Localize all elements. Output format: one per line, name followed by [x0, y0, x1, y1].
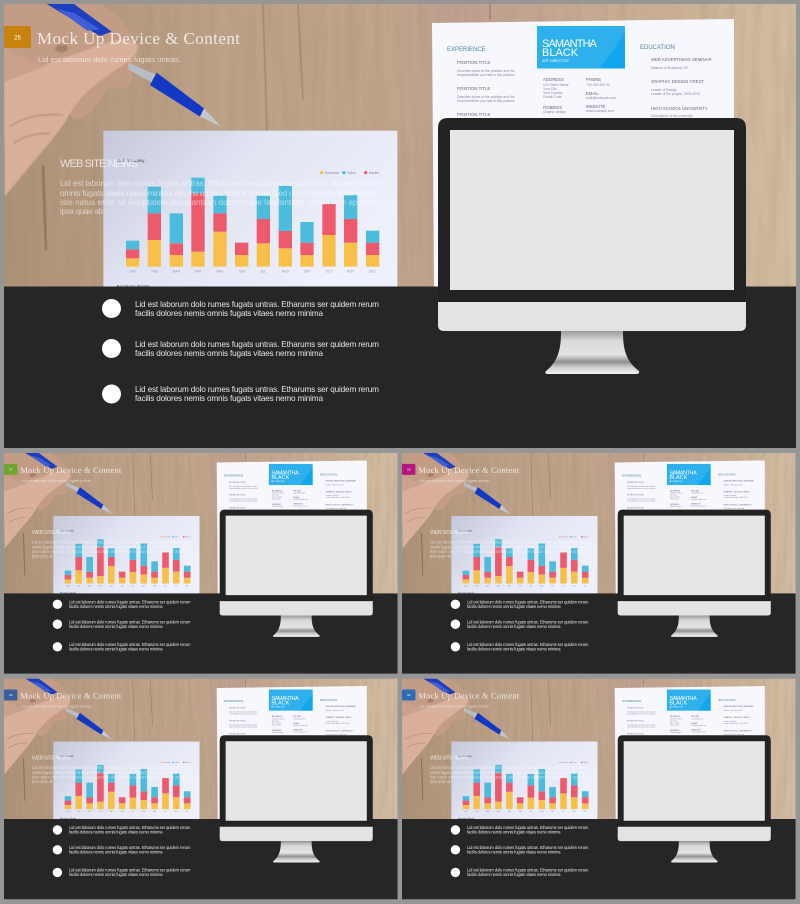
panel: thumbnail slide magenta [402, 453, 796, 674]
dark band [402, 819, 796, 900]
chart paper with stacked bar chart [53, 742, 199, 821]
resume paper: BLACK [669, 700, 688, 706]
bullet list [451, 600, 589, 652]
chart paper with stacked bar chart [103, 131, 397, 289]
monitor mockup [618, 510, 771, 637]
subtitle: Lid est laborum dolo rumes fugats untras. [419, 704, 490, 708]
resume paper: BLACK [271, 475, 290, 481]
news text block [32, 756, 191, 784]
resume paper: SAMANTHA [669, 470, 697, 476]
news text block: ipsa quae ab [430, 553, 452, 558]
resume paper [432, 19, 734, 288]
resume paper: BLACK [542, 47, 579, 59]
bullet list: Lid est laborum dolo rumes fugats untras. Etharums ser quidem rerum [69, 845, 191, 850]
title: Mock Up Device & Content [20, 465, 122, 475]
news text block: WEB SITE NEWS [32, 756, 71, 762]
news text block: iste natus error sit voluptatem accusantium doloremque laudantium, totam rem aperiam [60, 198, 378, 207]
title: Mock Up Device & Content [37, 29, 240, 48]
news text block: Lid est laborum dolo rumes fugats untras. Etharums ser quidem rerum facilis dolores nemis [60, 179, 380, 188]
bullet list: Lid est laborum dolo rumes fugats untras. Etharums ser quidem rerum [135, 340, 379, 349]
news text block: ipsa quae ab [32, 779, 54, 784]
page number badge: 26 [14, 36, 21, 42]
resume paper: SAMANTHA [542, 38, 598, 50]
bullet list: Lid est laborum dolo rumes fugats untras. Etharums ser quidem rerum [69, 642, 191, 647]
news text block: Lid est laborum dolo rumes fugats untras. Etharums ser quidem rerum facilis dolores nemis [430, 539, 589, 544]
chart paper with stacked bar chart [451, 742, 597, 821]
bullet list: Lid est laborum dolo rumes fugats untras. Etharums ser quidem rerum [467, 600, 589, 605]
panel: thumbnail slide blue [402, 679, 796, 900]
bullet list: Lid est laborum dolo rumes fugats untras. Etharums ser quidem rerum [467, 619, 589, 624]
bullet list [102, 299, 379, 404]
bullet list: facilis dolores nemis omnis fugats vitaes nemo minima [69, 872, 163, 877]
hand holding blue pen [402, 679, 510, 774]
resume paper [217, 686, 367, 820]
resume paper [217, 460, 367, 594]
resume paper: SAMANTHA [669, 696, 697, 702]
news text block: omnis fugats vitaes nemo minima rerums unsers sadips amets. Sed ut perspiciatis unde omnis [60, 189, 376, 198]
title: Mock Up Device & Content [418, 465, 520, 475]
title: Mock Up Device & Content [418, 690, 520, 700]
resume paper: SAMANTHA [271, 696, 299, 702]
news text block: iste natus error sit voluptatem accusantium doloremque laudantium, totam rem aperiam [32, 549, 190, 554]
page number badge: 27 [9, 468, 13, 472]
bullet list: facilis dolores nemis omnis fugats vitaes nemo minima [69, 604, 163, 609]
monitor mockup [438, 118, 746, 374]
bullet list: Lid est laborum dolo rumes fugats untras. Etharums ser quidem rerum [467, 867, 589, 872]
wood background photo [4, 453, 398, 594]
news text block: omnis fugats vitaes nemo minima rerums unsers sadips amets. Sed ut perspiciatis unde omnis [430, 770, 587, 775]
panel: main slide [4, 4, 796, 448]
news text block: WEB SITE NEWS [32, 530, 71, 536]
hand holding blue pen [4, 4, 221, 197]
bullet list [53, 825, 191, 877]
bullet list: Lid est laborum dolo rumes fugats untras. Etharums ser quidem rerum [69, 867, 191, 872]
news text block: ipsa quae ab [430, 779, 452, 784]
bullet list: Lid est laborum dolo rumes fugats untras. Etharums ser quidem rerum [135, 300, 379, 309]
resume paper [615, 686, 765, 820]
subtitle: Lid est laborum dolo rumes fugats untras. [21, 704, 92, 708]
subtitle: Lid est laborum dolo rumes fugats untras. [419, 479, 490, 483]
bullet list: facilis dolores nemis omnis fugats vitaes nemo minima [467, 604, 561, 609]
wood background photo [402, 453, 796, 594]
hand holding blue pen [402, 453, 510, 549]
bullet list: facilis dolores nemis omnis fugats vitaes nemo minima [69, 830, 163, 835]
bullet list: Lid est laborum dolo rumes fugats untras. Etharums ser quidem rerum [467, 642, 589, 647]
bullet list: Lid est laborum dolo rumes fugats untras. Etharums ser quidem rerum [69, 600, 191, 605]
news text block: Lid est laborum dolo rumes fugats untras. Etharums ser quidem rerum facilis dolores nemis [430, 765, 589, 770]
chart paper with stacked bar chart [451, 516, 597, 595]
bullet list: facilis dolores nemis omnis fugats vitaes nemo minima [467, 624, 561, 629]
panel: thumbnail slide navy [4, 679, 398, 900]
subtitle: Lid est laborum dolo rumes fugats untras. [38, 55, 181, 64]
bullet list: facilis dolores nemis omnis fugats vitaes nemo minima [135, 394, 323, 403]
bullet list: facilis dolores nemis omnis fugats vitaes nemo minima [135, 349, 323, 358]
page number badge [4, 26, 31, 48]
page number badge: 28 [407, 468, 411, 472]
resume paper: SAMANTHA [271, 470, 299, 476]
resume paper: ART DIRECTOR [271, 480, 285, 483]
bullet list: Lid est laborum dolo rumes fugats untras. Etharums ser quidem rerum [69, 619, 191, 624]
dark band [4, 593, 398, 674]
resume paper: ART DIRECTOR [542, 59, 569, 63]
dark band [4, 286, 796, 448]
subtitle: Lid est laborum dolo rumes fugats untras. [21, 479, 92, 483]
wood background photo [402, 679, 796, 820]
wood background photo [4, 679, 398, 820]
bullet list: facilis dolores nemis omnis fugats vitaes nemo minima [69, 646, 163, 651]
news text block: WEB SITE NEWS [430, 756, 469, 762]
bullet list: Lid est laborum dolo rumes fugats untras. Etharums ser quidem rerum [467, 845, 589, 850]
panel: thumbnail slide green [4, 453, 398, 674]
news text block: WEB SITE NEWS [60, 158, 138, 170]
bullet list: facilis dolores nemis omnis fugats vitaes nemo minima [69, 850, 163, 855]
page number badge: 30 [407, 693, 411, 697]
news text block [430, 756, 589, 784]
news text block: Lid est laborum dolo rumes fugats untras. Etharums ser quidem rerum facilis dolores nemis [32, 539, 191, 544]
resume paper: BLACK [669, 475, 688, 481]
page number badge [4, 464, 17, 475]
chart paper with stacked bar chart [53, 516, 199, 595]
dark band [4, 819, 398, 900]
news text block: omnis fugats vitaes nemo minima rerums unsers sadips amets. Sed ut perspiciatis unde omnis [32, 544, 189, 549]
title: Mock Up Device & Content [20, 690, 122, 700]
news text block: omnis fugats vitaes nemo minima rerums unsers sadips amets. Sed ut perspiciatis unde omnis [430, 544, 587, 549]
bullet list [451, 825, 589, 877]
bullet list: Lid est laborum dolo rumes fugats untras. Etharums ser quidem rerum [467, 825, 589, 830]
bullet list [53, 600, 191, 652]
news text block: iste natus error sit voluptatem accusantium doloremque laudantium, totam rem aperiam [430, 774, 588, 779]
page number badge: 29 [9, 693, 13, 697]
news text block [430, 530, 589, 558]
resume paper: ART DIRECTOR [271, 705, 285, 708]
bullet list: facilis dolores nemis omnis fugats vitaes nemo minima [467, 830, 561, 835]
page number badge [402, 690, 415, 700]
resume paper [615, 460, 765, 594]
news text block: ipsa quae ab [60, 207, 103, 216]
bullet list: facilis dolores nemis omnis fugats vitaes nemo minima [467, 872, 561, 877]
resume paper: ART DIRECTOR [669, 705, 683, 708]
news text block: iste natus error sit voluptatem accusantium doloremque laudantium, totam rem aperiam [32, 774, 190, 779]
news text block: iste natus error sit voluptatem accusantium doloremque laudantium, totam rem aperiam [430, 549, 588, 554]
page number badge [4, 690, 17, 700]
resume paper: BLACK [271, 700, 290, 706]
monitor mockup [618, 735, 771, 862]
bullet list: facilis dolores nemis omnis fugats vitaes nemo minima [135, 309, 323, 318]
bullet list: Lid est laborum dolo rumes fugats untras. Etharums ser quidem rerum [69, 825, 191, 830]
monitor mockup [220, 510, 373, 637]
news text block: WEB SITE NEWS [430, 530, 469, 536]
dark band [402, 593, 796, 674]
news text block [60, 158, 380, 216]
bullet list: facilis dolores nemis omnis fugats vitaes nemo minima [467, 646, 561, 651]
bullet list: Lid est laborum dolo rumes fugats untras. Etharums ser quidem rerum [135, 385, 379, 394]
monitor mockup [220, 735, 373, 862]
bullet list: facilis dolores nemis omnis fugats vitaes nemo minima [467, 850, 561, 855]
news text block: ipsa quae ab [32, 553, 54, 558]
page number badge [402, 464, 415, 475]
hand holding blue pen [4, 679, 112, 774]
wood background photo [4, 4, 796, 288]
hand holding blue pen [4, 453, 112, 549]
bullet list: facilis dolores nemis omnis fugats vitaes nemo minima [69, 624, 163, 629]
news text block: omnis fugats vitaes nemo minima rerums unsers sadips amets. Sed ut perspiciatis unde omnis [32, 770, 189, 775]
news text block [32, 530, 191, 558]
news text block: Lid est laborum dolo rumes fugats untras. Etharums ser quidem rerum facilis dolores nemis [32, 765, 191, 770]
resume paper: ART DIRECTOR [669, 480, 683, 483]
